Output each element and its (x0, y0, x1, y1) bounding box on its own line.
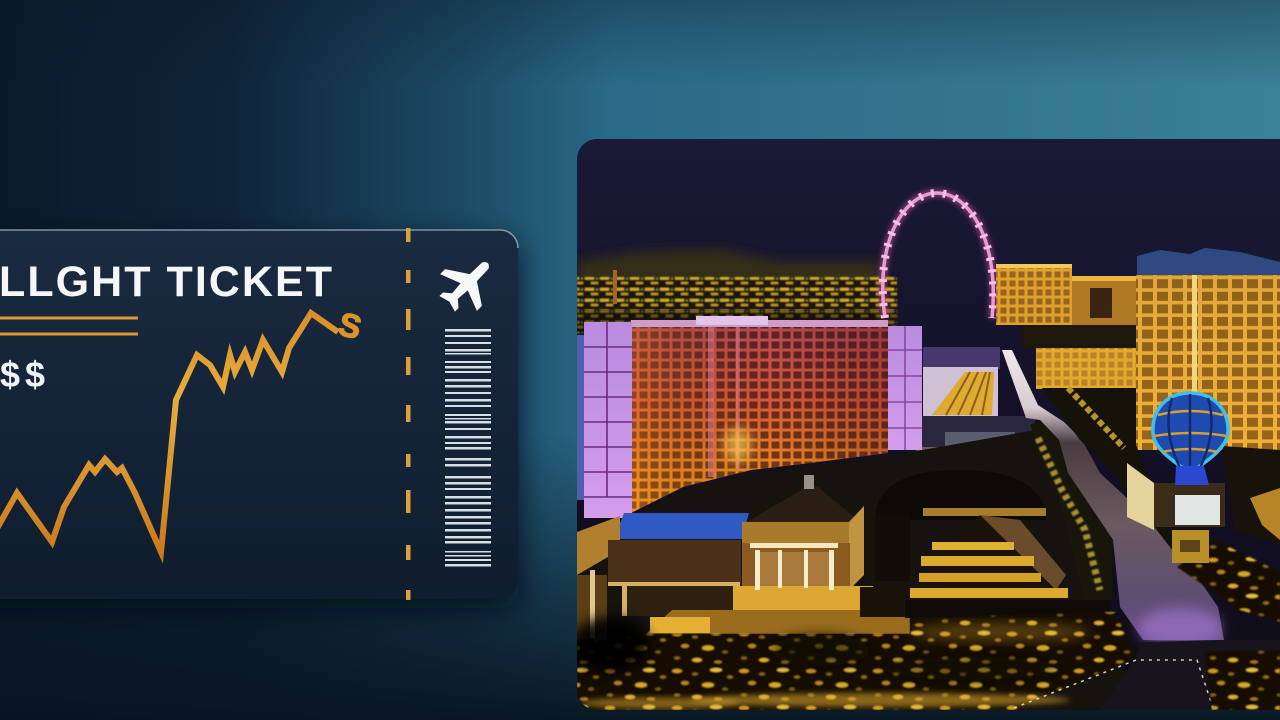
low gold building (1022, 325, 1138, 389)
ferris wheel (883, 193, 993, 318)
city lights band (577, 270, 897, 333)
main hotel tower (577, 316, 922, 518)
gold hotels on skyline (996, 264, 1138, 325)
panel: Las Vegas night photo (570, 139, 1280, 710)
barcode (445, 329, 491, 566)
lit gardens (570, 612, 1136, 710)
dark roofline and lower plaza (577, 430, 1140, 710)
ticket title: LLGHT TICKET (0, 258, 332, 306)
left low pavilion (577, 516, 910, 640)
price line chart (0, 305, 365, 552)
pyramid building with lit terraces (860, 515, 1110, 618)
left purple column (577, 322, 632, 518)
perforation dashed line (406, 228, 410, 600)
tall gold tower with blue roof (1136, 248, 1280, 450)
globe (1153, 393, 1228, 485)
night sky (577, 139, 1280, 710)
right purple column (888, 326, 922, 450)
icon: airplane (429, 245, 506, 322)
roadside lit trees (1030, 388, 1280, 710)
road strip with light trails (1002, 350, 1229, 710)
Paris hotel balloon sign (1127, 393, 1228, 563)
dark domed roof (876, 470, 1046, 520)
stage with yellow stripes (915, 347, 1035, 452)
center domed building (733, 475, 873, 610)
gold underlines (0, 316, 138, 336)
chart dollar sign: S (335, 305, 365, 346)
distant hills (577, 250, 880, 285)
panel: flight ticket (0, 228, 518, 608)
price symbols: $$ (0, 354, 50, 395)
blue pool (614, 513, 749, 539)
